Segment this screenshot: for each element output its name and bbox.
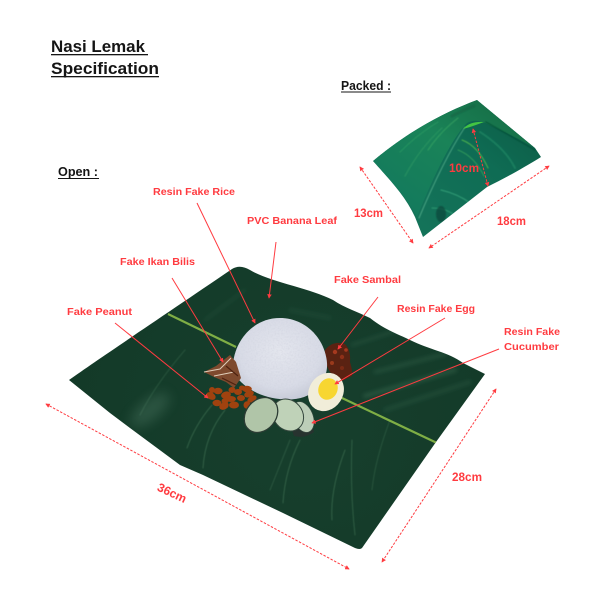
- label: resin fake cucumber: [312, 326, 560, 423]
- label: resin fake egg: [335, 303, 475, 384]
- lower leaf veins: [140, 350, 390, 535]
- heading: open: Open :: [58, 165, 98, 179]
- dimension: 18cm: 18cm: [497, 214, 526, 228]
- open banana leaf: [60, 260, 490, 555]
- title: [51, 37, 159, 78]
- dimension: 10cm: [449, 129, 488, 186]
- label: fake peanut: Fake Peanut: [67, 306, 133, 318]
- resin fake egg: [301, 366, 351, 418]
- parcel front streaks: [432, 132, 515, 216]
- dimension: 13cm: [354, 167, 413, 243]
- label: fake sambal: Fake Sambal: [334, 274, 401, 286]
- label: resin fake rice: Resin Fake Rice: [153, 186, 235, 198]
- flap streaks: [400, 106, 535, 218]
- packed parcel top flap: [373, 100, 535, 217]
- label: pvc banana leaf: PVC Banana Leaf: [247, 215, 338, 227]
- label: fake ikan bilis: [120, 256, 223, 362]
- dimension: 10cm: 10cm: [449, 161, 479, 175]
- dimension: 28cm: [382, 389, 496, 562]
- dimension: 36cm: [46, 404, 349, 569]
- resin fake rice: [233, 318, 327, 400]
- light inner fold: [463, 122, 484, 129]
- fake ikan bilis: [204, 355, 241, 388]
- fake sambal: [325, 343, 352, 382]
- label: fake sambal: [334, 274, 401, 349]
- resin fake cucumber: [237, 391, 318, 439]
- label: resin fake egg: Resin Fake Egg: [397, 303, 475, 315]
- title: Specification: [51, 59, 159, 78]
- label: resin fake cucumber: Cucumber: [504, 341, 559, 353]
- dimension: 18cm: [429, 166, 549, 248]
- label: resin fake cucumber: Resin Fake: [504, 326, 560, 338]
- dimension: 28cm: 28cm: [452, 470, 482, 484]
- fake peanuts: [205, 386, 258, 411]
- label: pvc banana leaf: [247, 215, 338, 298]
- packed banana leaf parcel: [373, 100, 541, 237]
- label: resin fake rice: [153, 186, 255, 323]
- label: fake ikan bilis: Fake Ikan Bilis: [120, 256, 195, 268]
- title: Nasi Lemak: [51, 37, 146, 56]
- parcel fold hollow: [436, 206, 446, 222]
- label: fake peanut: [67, 306, 208, 398]
- dimension: 36cm: 36cm: [155, 480, 189, 506]
- upper leaf veins: [354, 332, 469, 410]
- dimension: 13cm: 13cm: [354, 206, 383, 220]
- heading: packed: Packed :: [341, 79, 391, 93]
- midrib: [168, 314, 437, 443]
